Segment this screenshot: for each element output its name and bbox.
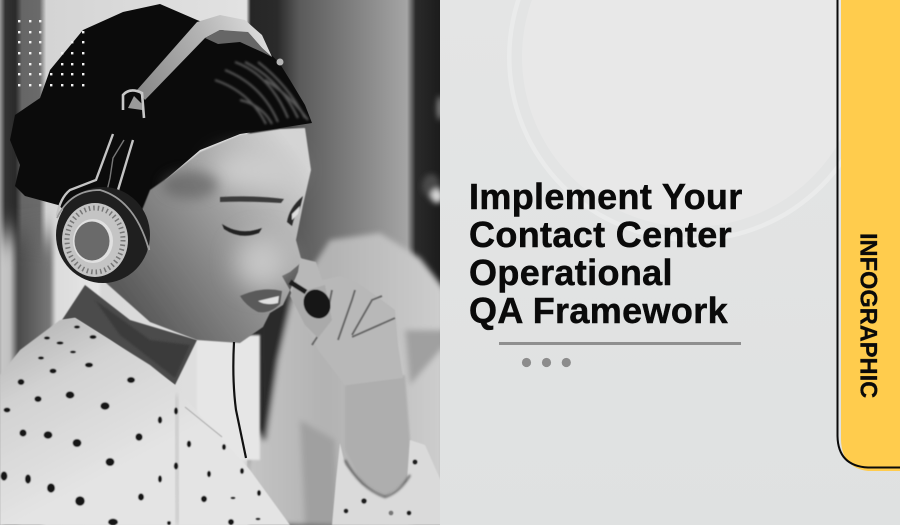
lips (240, 289, 282, 312)
yellow side tab (838, 0, 900, 471)
face (105, 128, 311, 343)
shirt cuff (332, 440, 445, 525)
shirt (0, 318, 290, 525)
neck (62, 285, 197, 385)
title: QA Framework (469, 290, 729, 331)
title: Contact Center (469, 214, 732, 255)
dot grid (18, 20, 84, 86)
photo: woman with headset (0, 0, 445, 525)
title (469, 176, 743, 331)
headband slider (123, 90, 144, 118)
title: Implement Your (469, 176, 743, 217)
earcup (56, 187, 150, 283)
title: Operational (469, 252, 673, 293)
divider rule (499, 342, 741, 345)
hair (10, 4, 312, 210)
microphone (303, 289, 331, 319)
headset (56, 15, 284, 283)
hair strand highlights (215, 62, 308, 124)
arm (345, 375, 410, 497)
hand with microphone (290, 258, 403, 385)
tab label: INFOGRAPHIC (854, 233, 880, 398)
decorative circle (592, 211, 790, 242)
blurred background person (235, 96, 445, 525)
eyebrow and eyes (220, 196, 303, 236)
three dots (522, 358, 571, 367)
shirt polka dots (1, 325, 261, 525)
panel: grey title background (440, 0, 900, 525)
headband (137, 15, 272, 100)
headset arms (57, 134, 149, 250)
headphone cable (233, 342, 246, 458)
